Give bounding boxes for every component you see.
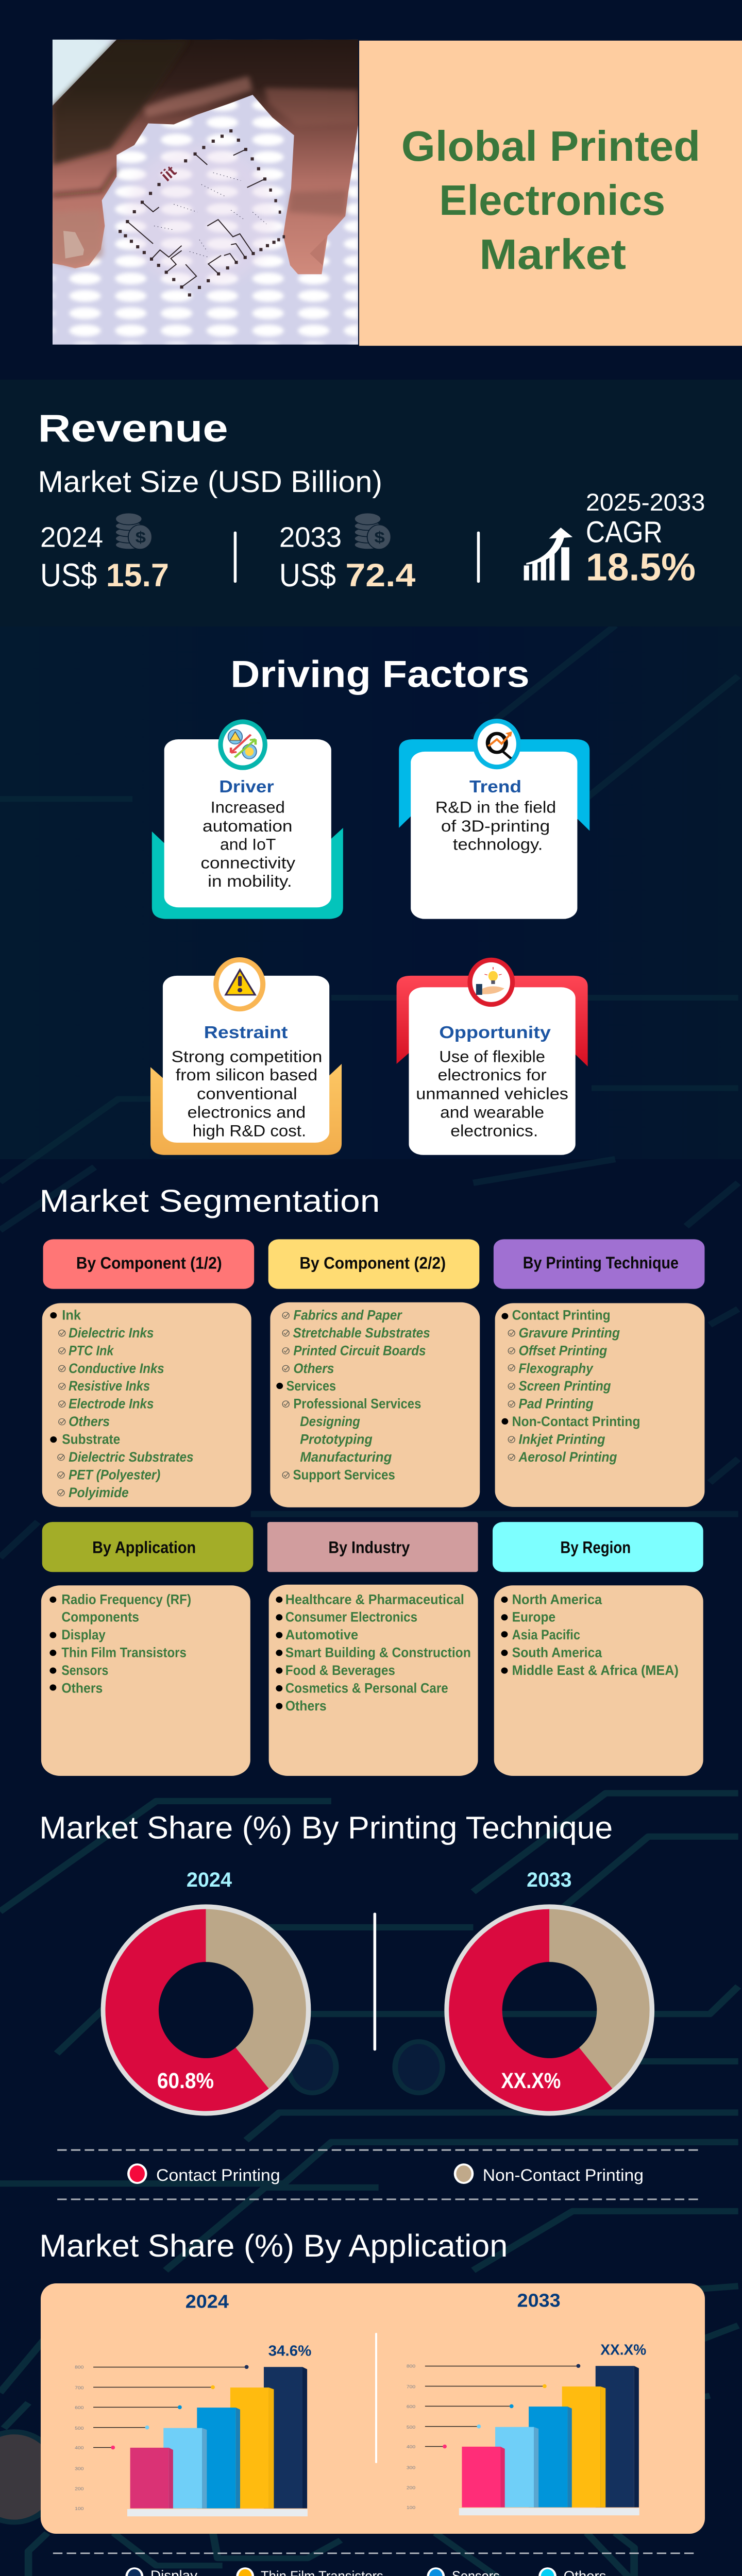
header: by application [42,1522,253,1572]
revenue 2024: 2024 [40,521,103,553]
market size label: Market Size (USD Billion) [38,465,382,499]
panel: industry list: Consumer Electronics [285,1609,417,1625]
bar chart 2024: 300 [75,2466,83,2471]
bar chart 2024: 100 [75,2506,83,2511]
panel: application list: Components [61,1609,139,1625]
divider [375,2333,377,2463]
bar chart 2033: 400 [407,2444,415,2449]
opportunity text: unmanned vehicles [416,1084,568,1103]
card: driver [152,719,343,919]
market segmentation section [39,1183,704,1776]
restraint text: electronics and [188,1103,306,1121]
revenue 2033: 72.4 [345,557,416,594]
trend text: R&D in the field [435,798,556,816]
panel: component list 2: Manufacturing [300,1449,392,1465]
revenue 2033: 2033 [279,521,342,553]
donut chart 2024: 60.8% [157,2069,214,2093]
circuit background: upper [0,625,738,1182]
donut chart 2033: XX.X% [501,2069,561,2093]
trend text: of 3D-printing [441,817,550,835]
driver text: in mobility. [208,872,292,890]
revenue heading: Revenue [38,406,228,450]
panel: printing technique list: Non-Contact Printing [512,1414,640,1429]
revenue panel background [0,380,742,626]
bar chart 2033: 800 [407,2363,415,2368]
card: trend [399,719,589,919]
revenue 2024: 15.7 [106,557,169,594]
bar chart 2024: 500 [75,2426,83,2431]
opportunity text: and wearable [440,1103,544,1121]
circuit background: segmentation [0,1159,738,1557]
panel: printing technique list: Gravure Printing [519,1325,620,1341]
bar chart 2033: XX.X% [600,2341,646,2358]
revenue 2033: US$ [279,557,336,594]
driver text: Driver [219,777,274,796]
icon: growth chart arrow [524,528,572,581]
panel: application list: Display [61,1628,106,1642]
title [401,123,700,278]
bar chart 2033: 700 [407,2384,415,2389]
restraint text: Restraint [204,1023,288,1042]
title panel [359,41,742,346]
hero photo: hand holding printed circuit film [53,39,359,345]
opportunity text: electronics. [450,1122,538,1140]
bar chart 2033 [407,2290,646,2515]
driver text: and IoT [220,835,276,854]
background band: driving factors [0,626,742,1159]
header: by component 2: By Component (2/2) [299,1254,446,1273]
donut chart 2024 [101,1869,311,2116]
panel: industry list [269,1585,478,1776]
icon: coins 2024 [115,513,152,549]
panel: component list 1: Dielectric Substrates [69,1449,194,1465]
divider [374,1913,376,2050]
segmentation heading: Market Segmentation [39,1183,380,1218]
revenue 2033 [279,521,416,594]
revenue 2024 [40,521,169,594]
header: by region [493,1522,703,1572]
title: Global Printed [401,123,700,170]
revenue section [0,380,742,626]
bar chart 2024: 2024 [185,2291,229,2312]
header: by printing technique: By Printing Technique [523,1253,679,1272]
panel: component list 1: PTC Ink [69,1343,114,1359]
circuit background: market share charts [0,1793,738,2393]
panel: component list 1: Resistive Inks [69,1379,150,1394]
restraint text: from silicon based [176,1066,317,1084]
panel: printing technique list: Inkjet Printing [519,1432,605,1447]
header: by component 1 [43,1239,254,1289]
panel: component list 1: Electrode Inks [69,1396,154,1412]
bar chart 2033: 500 [407,2425,415,2430]
market share by printing technique section [39,1810,701,2263]
panel: application list [41,1585,250,1776]
panel: application list: Thin Film Transistors [61,1645,187,1660]
panel: component list 2: Fabrics and Paper [293,1308,402,1323]
bar chart 2024: 700 [75,2385,83,2390]
panel: component list 1: Others [69,1414,110,1429]
trend text: Trend [469,777,521,796]
panel: component list 2: Designing [300,1414,360,1429]
panel: component list 1: Ink [62,1308,81,1323]
donut chart 2033 [444,1869,654,2116]
legend: printing technique: Non-Contact Printing [483,2166,644,2184]
legend: printing technique [127,2163,644,2184]
header: by industry [267,1522,478,1572]
panel: component list 1: Conductive Inks [69,1361,164,1376]
panel: region list: South America [512,1645,602,1660]
panel: industry list: Automotive [285,1628,358,1642]
panel: region list [494,1585,703,1776]
icon: coins 2024: $ [136,529,146,546]
bar chart 2024: 800 [75,2364,83,2369]
CAGR: 2025-2033 [586,489,705,516]
panel: industry list: Cosmetics & Personal Care [285,1681,448,1696]
bar chart 2024 [75,2291,311,2516]
trend text: technology. [453,835,543,854]
panel: region list: Middle East & Africa (MEA) [512,1663,679,1678]
panel: component list 2: Printed Circuit Boards [293,1343,426,1359]
title: Electronics [439,177,665,224]
panel: application list: Radio Frequency (RF) [61,1592,191,1607]
panel: component list 1: Substrate [62,1432,120,1447]
panel: industry list: Others [285,1698,327,1714]
panel: application charts [41,2283,705,2534]
panel: component list 2: Professional Services [293,1396,421,1412]
CAGR: 18.5% [586,546,696,589]
bar chart 2024: 200 [75,2486,83,2491]
driver text: Increased [211,798,285,816]
restraint text [171,1023,322,1140]
panel: application list: Sensors [61,1663,108,1678]
driver text: automation [203,817,293,835]
panel: component list 1: Dielectric Inks [69,1325,154,1341]
header: by component 1: By Component (1/2) [76,1254,222,1273]
header: by industry: By Industry [328,1538,410,1557]
opportunity text: Use of flexible [439,1047,545,1065]
panel: printing technique list [495,1303,704,1507]
driver text [200,777,296,890]
printing technique heading: Market Share (%) By Printing Technique [39,1810,613,1845]
bar chart 2033: 100 [407,2505,415,2510]
panel: component list 2: Services [286,1379,336,1394]
panel: component list 2: Stretchable Substrates [293,1325,430,1341]
circuit background: pads and traces [0,2396,742,2576]
restraint text: conventional [197,1084,297,1103]
panel: component list 1 [42,1303,251,1507]
panel: printing technique list: Pad Printing [519,1396,594,1412]
panel: printing technique list: Contact Printing [512,1308,611,1323]
header: by region: By Region [560,1538,631,1557]
icon: restraint warning [213,957,265,1011]
panel: industry list: Healthcare & Pharmaceutical [285,1592,464,1607]
bar chart 2024: 600 [75,2405,83,2410]
panel: component list 2: Prototyping [300,1432,373,1447]
trend text [435,777,556,854]
panel: component list 1: PET (Polyester) [69,1467,160,1483]
opportunity text: Opportunity [439,1023,551,1042]
opportunity text: electronics for [437,1066,547,1084]
CAGR [586,489,705,589]
application legend and region heading [39,2553,698,2576]
donut chart 2024: 2024 [187,1869,232,1891]
panel: region list: North America [512,1592,602,1607]
panel: printing technique list: Offset Printing [519,1343,607,1359]
legend: printing technique: Contact Printing [156,2166,280,2184]
panel: region list: Europe [512,1609,555,1625]
bar chart 2033: 600 [407,2404,415,2409]
opportunity text [416,1023,568,1140]
icon: driver gears and arrows [218,719,267,770]
legend: application [125,2567,606,2576]
panel: printing technique list: Screen Printing [519,1379,611,1394]
dividers [234,532,480,583]
title: Market [479,231,626,278]
icon: coins 2033: $ [374,529,385,546]
icon: trend magnifier [473,719,521,769]
bar chart 2024: 34.6% [268,2342,311,2359]
hero photo: hand holding printed circuit film: iit [158,162,180,185]
restraint text: Strong competition [171,1047,322,1065]
panel: component list 2: Support Services [293,1467,395,1483]
panel: component list 1: Polyimide [69,1485,129,1500]
bar chart 2033: 300 [407,2465,415,2470]
header: by printing technique [494,1239,704,1289]
bar chart 2033: 200 [407,2485,415,2490]
header: by application: By Application [92,1538,196,1557]
panel: region list: Asia Pacific [512,1628,580,1642]
card: restraint [150,957,342,1155]
panel: industry list: Food & Beverages [285,1663,395,1678]
CAGR: CAGR [586,515,663,549]
donut chart 2033: 2033 [527,1869,571,1891]
card: opportunity [397,958,588,1155]
header: by component 2 [268,1239,479,1289]
driving factors section [150,653,589,1155]
panel: industry list: Smart Building & Construction [285,1645,471,1660]
driver text: connectivity [200,854,296,872]
revenue 2024: US$ [40,557,97,594]
bar chart 2024: 400 [75,2445,83,2450]
panel: printing technique list: Aerosol Printing [518,1449,617,1465]
restraint text: high R&D cost. [193,1122,306,1140]
icon: coins 2033 [355,513,391,549]
bar chart 2033: 2033 [517,2290,561,2311]
panel: component list 2 [270,1302,480,1507]
panel: component list 2: Others [293,1361,334,1376]
application heading: Market Share (%) By Application [39,2229,508,2263]
panel: application list: Others [61,1681,103,1696]
header section [359,41,742,346]
icon: opportunity bulb and hand [467,958,515,1007]
driving factors heading: Driving Factors [230,653,530,696]
panel: printing technique list: Flexography [519,1361,594,1376]
